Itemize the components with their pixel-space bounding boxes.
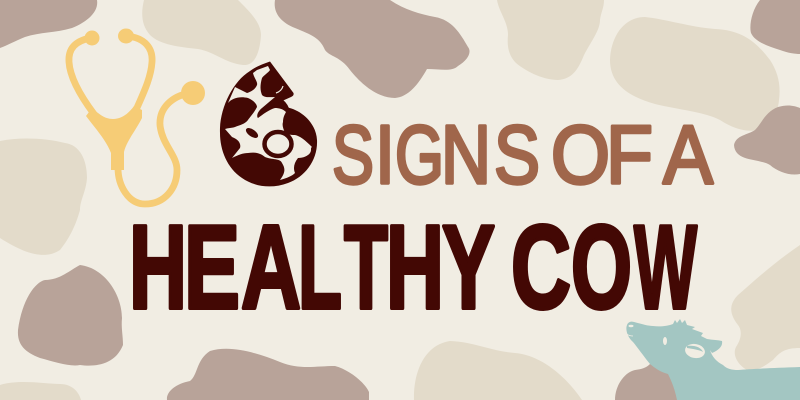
heading: healthy cow: O bbox=[571, 201, 632, 334]
illustration: cow looking up bbox=[626, 319, 800, 400]
heading: signs of a: A bbox=[663, 108, 714, 201]
heading: signs of a: F bbox=[606, 108, 653, 201]
heading: healthy cow: H bbox=[386, 201, 444, 334]
heading: signs of a: S bbox=[332, 108, 374, 201]
heading: healthy cow: E bbox=[184, 201, 240, 334]
heading: signs of a bbox=[332, 108, 714, 201]
numeral: 6 with cow spots: 6 bbox=[240, 76, 296, 188]
heading: healthy cow: L bbox=[298, 201, 342, 334]
heading: healthy cow: W bbox=[634, 201, 697, 334]
heading: signs of a: I bbox=[375, 108, 395, 201]
heading: healthy cow: H bbox=[129, 201, 187, 334]
heading: signs of a: S bbox=[494, 108, 540, 201]
heading: signs of a: N bbox=[441, 108, 491, 201]
heading: healthy cow: Y bbox=[442, 201, 495, 334]
icon: stethoscope bbox=[69, 28, 205, 204]
heading: healthy cow bbox=[129, 201, 697, 334]
heading: healthy cow: C bbox=[511, 201, 571, 334]
heading: healthy cow: A bbox=[241, 201, 301, 334]
heading: signs of a: G bbox=[395, 108, 444, 201]
heading: signs of a: O bbox=[551, 108, 610, 201]
heading: healthy cow: T bbox=[344, 201, 388, 334]
numeral: 6 with cow spots bbox=[220, 62, 317, 188]
